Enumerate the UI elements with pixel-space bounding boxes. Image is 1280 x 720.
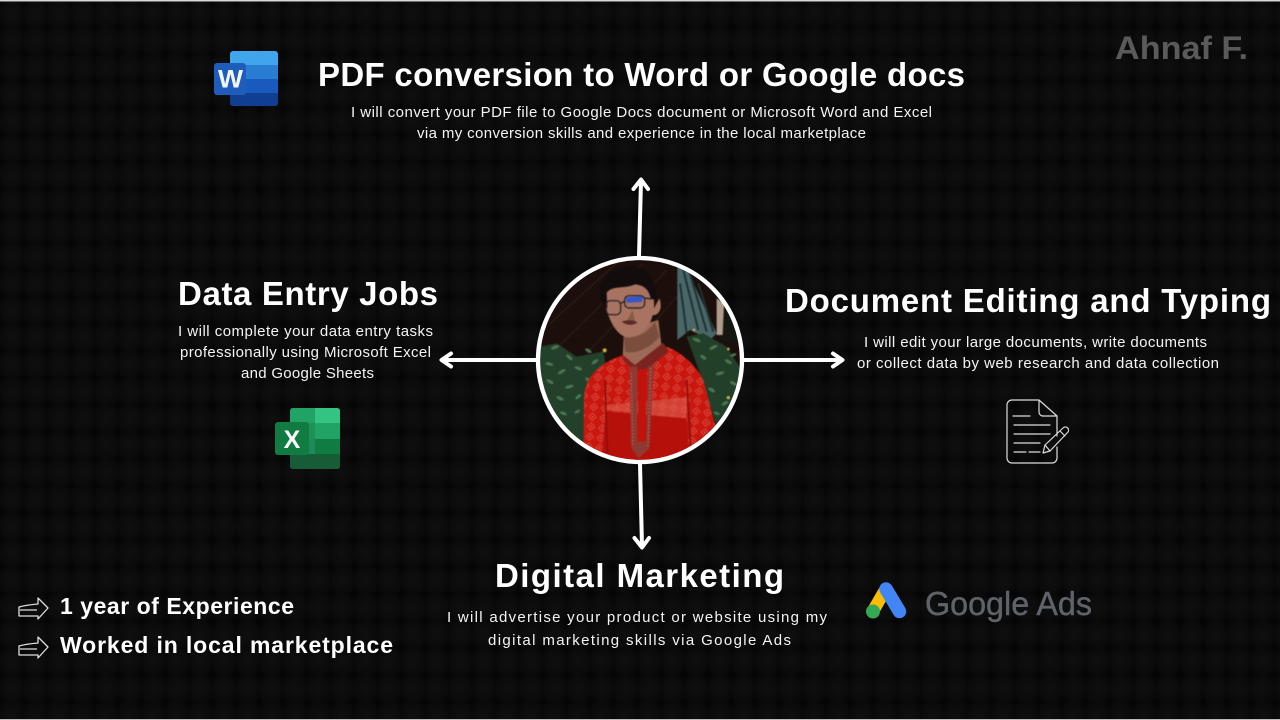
text: experience: 1 year of Experience bbox=[60, 593, 294, 619]
heading: Data Entry Jobs: Data Entry Jobs bbox=[178, 275, 438, 312]
icon: Microsoft Excel bbox=[275, 408, 340, 469]
watermark: Ahnaf F.: Ahnaf F. bbox=[1115, 30, 1248, 66]
text: marketplace: Worked in local marketplace bbox=[60, 632, 393, 658]
icon: Microsoft Excel: X bbox=[284, 426, 301, 454]
text: PDF conversion description: I will convert your PDF file to Google Docs document or Microsoft Word and Excel bbox=[351, 104, 932, 121]
icon: arrow bullet 1 bbox=[19, 598, 48, 619]
portrait photo bbox=[533, 253, 747, 473]
heading: Document Editing and Typing: Document Editing and Typing bbox=[785, 282, 1271, 319]
text: PDF conversion description bbox=[351, 104, 932, 142]
text: Digital Marketing description: digital marketing skills via Google Ads bbox=[488, 632, 791, 649]
text: Digital Marketing description: I will advertise your product or website using my bbox=[447, 609, 828, 626]
panel: PDF conversion bbox=[318, 56, 965, 142]
icon: Microsoft Word: W bbox=[218, 66, 243, 94]
icon: arrow bullet 2 bbox=[19, 637, 48, 658]
text: Digital Marketing description bbox=[447, 609, 828, 649]
arrow: down bbox=[634, 464, 649, 548]
logo: Google Ads bbox=[866, 585, 1092, 622]
text: Document Editing description bbox=[857, 334, 1219, 372]
text: Data Entry description: and Google Sheets bbox=[241, 365, 374, 382]
text: Document Editing description: I will edit your large documents, write documents bbox=[864, 334, 1207, 351]
arrow: left bbox=[442, 354, 536, 366]
heading: PDF conversion: PDF conversion to Word or Google docs bbox=[318, 56, 965, 93]
panel: Data Entry Jobs bbox=[178, 275, 438, 382]
text: Data Entry description: professionally using Microsoft Excel bbox=[180, 344, 431, 361]
icon: document with pen bbox=[1007, 400, 1069, 463]
panel: Digital Marketing bbox=[447, 557, 828, 649]
heading: Digital Marketing: Digital Marketing bbox=[495, 557, 784, 594]
list: experience bbox=[19, 593, 393, 658]
arrow: up bbox=[634, 180, 648, 256]
icon: Microsoft Word bbox=[214, 51, 278, 106]
text: PDF conversion description: via my conversion skills and experience in the local marketplace bbox=[417, 125, 866, 142]
text: Data Entry description bbox=[178, 323, 433, 382]
arrow: right bbox=[744, 354, 842, 366]
text: Data Entry description: I will complete your data entry tasks bbox=[178, 323, 433, 340]
panel: Document Editing and Typing bbox=[785, 282, 1271, 372]
wordmark: Google Ads: Google Ads bbox=[925, 585, 1092, 622]
text: Document Editing description: or collect data by web research and data collection bbox=[857, 355, 1219, 372]
icon: Google Ads mark bbox=[866, 589, 900, 618]
